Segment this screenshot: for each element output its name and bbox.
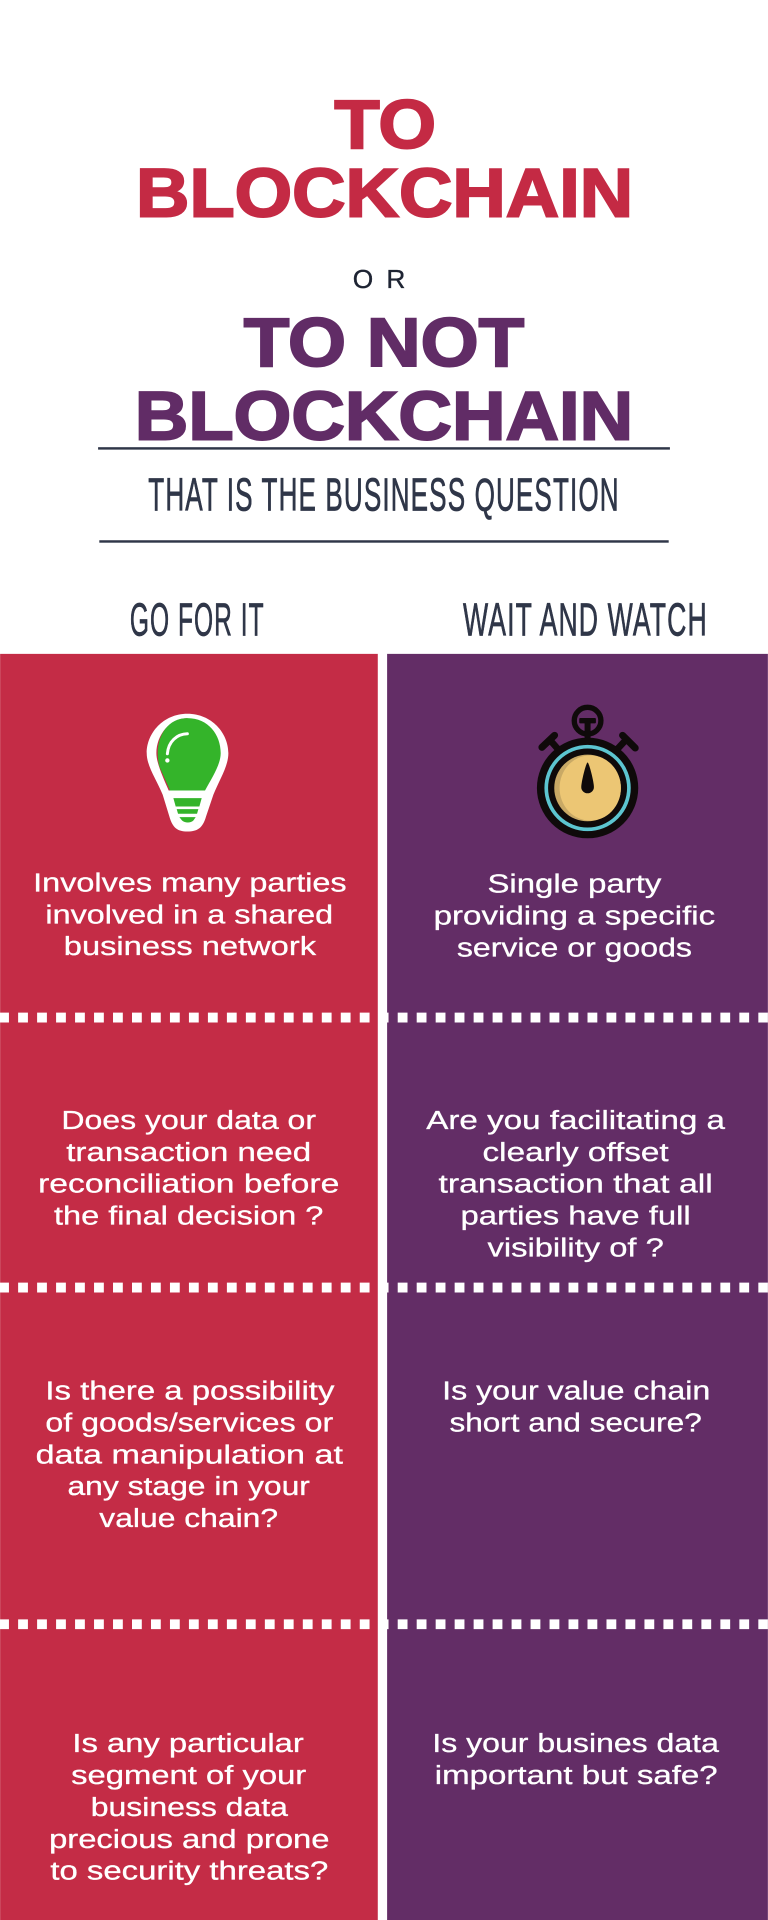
text: wait and watch row 3: Is your value chain	[442, 1378, 710, 1406]
text: go for it row 3: value chain?	[99, 1505, 278, 1533]
text: go for it row 2	[38, 1107, 339, 1230]
title: to not blockchain: BLOCKCHAIN	[135, 378, 633, 455]
text: go for it row 3: Is there a possibility	[45, 1378, 335, 1406]
text: wait and watch row 3: short and secure?	[450, 1409, 702, 1437]
text: go for it row 2: reconciliation before	[38, 1171, 339, 1199]
text: wait and watch row 4: important but safe?	[435, 1762, 718, 1790]
title: to blockchain: BLOCKCHAIN	[136, 155, 633, 232]
text: go for it row 4: business data	[91, 1794, 289, 1822]
text: wait and watch row 4: Is your busines data	[432, 1730, 720, 1758]
text: go for it row 2: Does your data or	[61, 1107, 317, 1135]
text: go for it row 1: business network	[64, 933, 316, 961]
text: go for it row 4: to security threats?	[50, 1858, 328, 1886]
icon: green light bulb	[147, 714, 228, 831]
text: wait and watch row 1: Single party	[487, 871, 662, 899]
text: go for it row 3: any stage in your	[67, 1473, 310, 1501]
title: to blockchain: TO	[334, 86, 436, 163]
text: go for it row 2: the final decision ?	[54, 1202, 323, 1230]
title: to blockchain	[136, 86, 633, 232]
text: go for it row 3: of goods/services or	[45, 1409, 334, 1437]
text: go for it row 3	[36, 1378, 343, 1533]
text: wait and watch row 1: providing a specific	[434, 902, 715, 930]
text: go for it row 1	[33, 869, 347, 961]
gutter between columns	[378, 654, 387, 1920]
word: or: O R	[353, 264, 405, 294]
text: wait and watch row 2: transaction that all	[438, 1171, 713, 1199]
text: wait and watch row 3	[442, 1378, 710, 1437]
text: go for it row 2: transaction need	[66, 1139, 311, 1167]
text: go for it row 1: Involves many parties	[33, 869, 347, 897]
divider: dotted row 1	[0, 1014, 768, 1022]
column heading: go for it: GO FOR IT	[130, 594, 265, 646]
text: wait and watch row 2: Are you facilitating a	[426, 1107, 726, 1135]
text: wait and watch row 2: visibility of ?	[487, 1234, 664, 1262]
text: go for it row 4: Is any particular	[72, 1730, 304, 1758]
text: go for it row 4: precious and prone	[49, 1826, 330, 1854]
icon: stopwatch	[537, 707, 638, 838]
text: go for it row 1: involved in a shared	[45, 901, 333, 929]
text: wait and watch row 4	[432, 1730, 720, 1790]
text: wait and watch row 2: clearly offset	[483, 1139, 669, 1167]
divider: dotted row 3	[0, 1620, 768, 1628]
text: wait and watch row 1	[434, 871, 715, 962]
panel: go for it column	[0, 654, 378, 1920]
divider: dotted row 2	[0, 1284, 768, 1292]
text: go for it row 4	[49, 1730, 330, 1886]
text: wait and watch row 1: service or goods	[457, 934, 692, 962]
title: to not blockchain	[135, 304, 633, 455]
text: go for it row 4: segment of your	[71, 1762, 307, 1790]
text: wait and watch row 2: parties have full	[461, 1202, 691, 1230]
title: to not blockchain: TO NOT	[244, 304, 524, 381]
text: go for it row 3: data manipulation at	[36, 1441, 343, 1469]
panel: wait and watch column	[387, 654, 768, 1920]
text: wait and watch row 2	[426, 1107, 726, 1262]
